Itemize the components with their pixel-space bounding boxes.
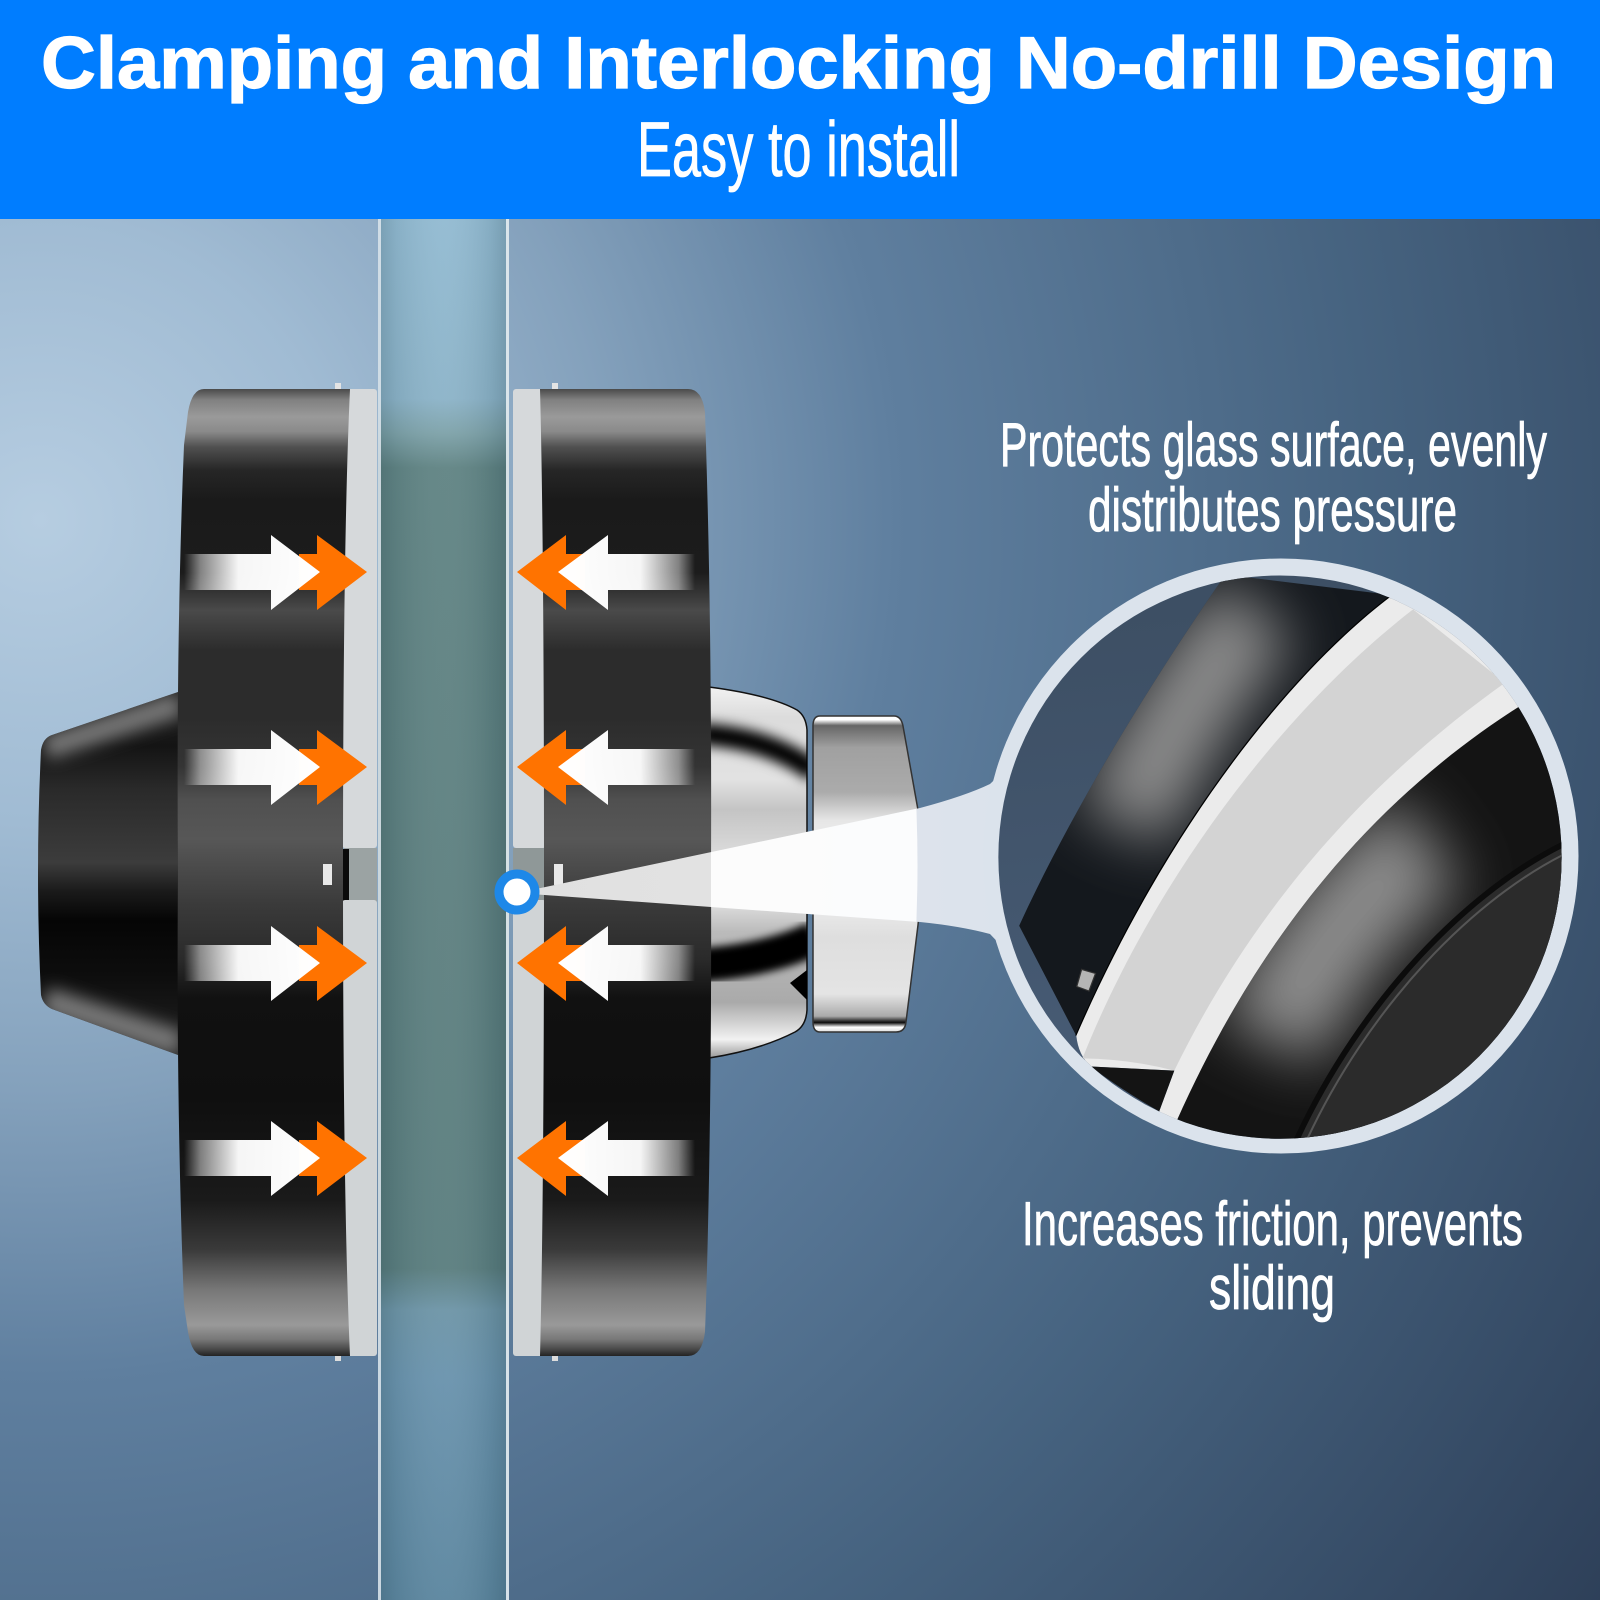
magnifier ring	[984, 558, 1578, 1154]
magnifier detail circle	[984, 558, 1580, 1160]
callout text: increases friction	[1022, 1190, 1523, 1323]
arrow row 2 left	[184, 730, 367, 805]
arrow row 2 right	[517, 730, 695, 805]
frosted glass panel	[378, 219, 509, 1600]
blue marker dot	[499, 874, 535, 910]
arrow row 3 right	[517, 926, 695, 1001]
textured grey pad	[1082, 609, 1505, 1071]
chrome dome	[710, 686, 808, 1058]
right gasket pad	[513, 383, 558, 1361]
lower black housing	[1176, 705, 1580, 1160]
top banner	[0, 0, 1600, 219]
outer black housing	[1019, 575, 1393, 1036]
arrow row 4 left	[184, 1121, 367, 1196]
title: Clamping and Interlocking No-drill Design	[41, 23, 1556, 104]
arrow row 4 right	[517, 1121, 695, 1196]
arrow row 1 left	[184, 535, 367, 610]
arrow row 1 right	[517, 535, 695, 610]
small metal pin	[1077, 969, 1096, 991]
black piece under pad	[1091, 1067, 1174, 1111]
right clamp disc	[540, 389, 711, 1356]
callout beam from marker to magnifier	[539, 780, 996, 940]
left knob	[38, 692, 180, 1055]
callout text: protects glass	[1000, 411, 1547, 545]
subtitle: Easy to install	[637, 105, 960, 193]
pressure arrows: right side	[517, 535, 695, 1196]
arrow row 3 left	[184, 926, 367, 1001]
left clamp disc	[178, 389, 350, 1356]
callout text: increases friction: sliding	[1209, 1254, 1335, 1323]
pressure arrows: left side	[184, 535, 367, 1196]
magnified view	[998, 576, 1562, 1139]
white pad rim	[1076, 581, 1531, 1124]
left gasket pad	[335, 383, 377, 1361]
inner ring section	[1294, 842, 1562, 1138]
chrome end cap	[813, 716, 922, 1032]
